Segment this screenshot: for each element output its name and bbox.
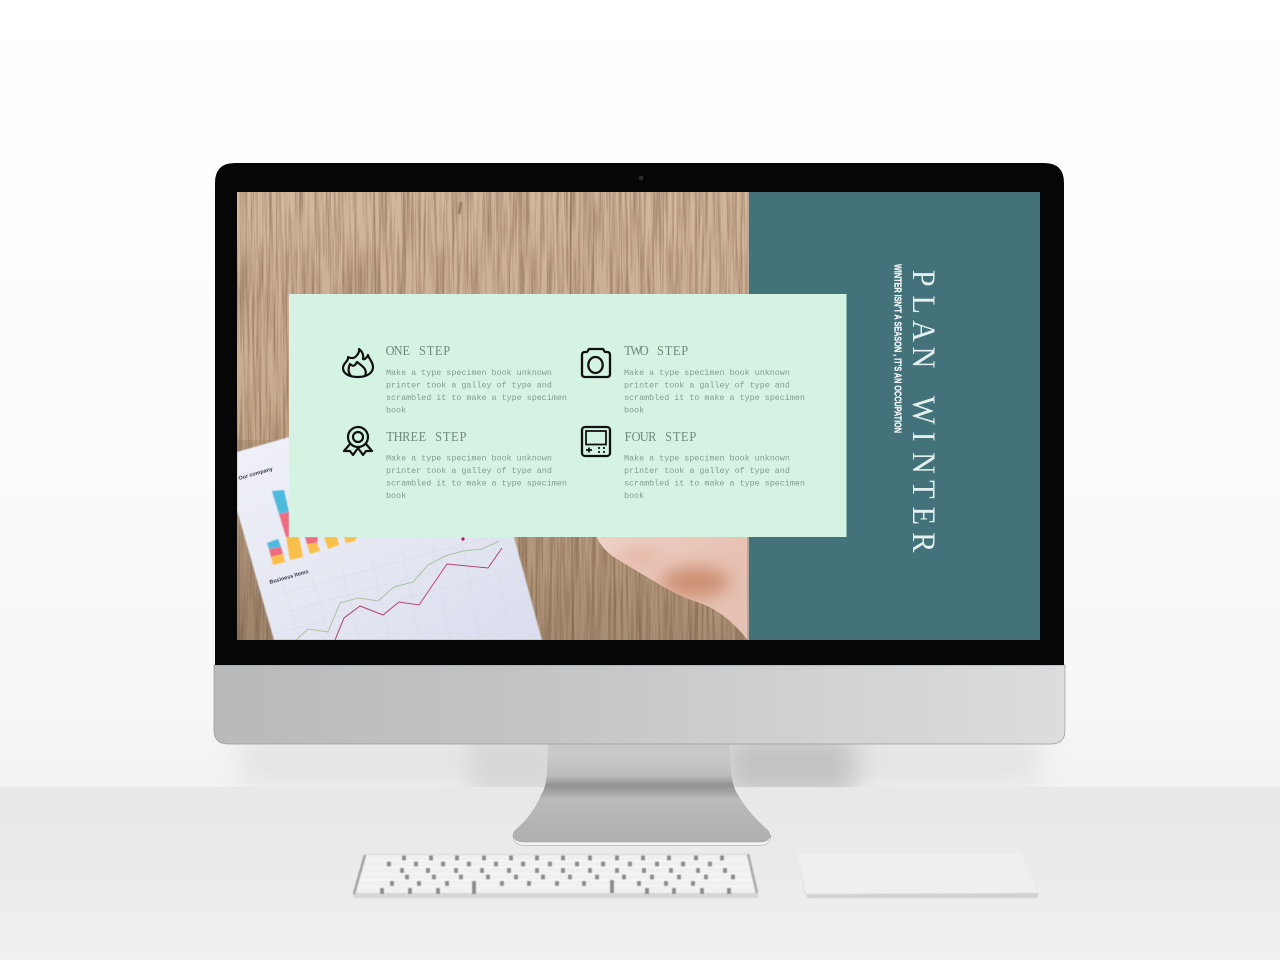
report paper bbox=[237, 437, 542, 640]
description bbox=[624, 368, 805, 416]
description bbox=[624, 454, 805, 501]
heading: THREE STEP bbox=[386, 429, 466, 444]
bar chart: our company bbox=[267, 490, 357, 565]
content card bbox=[289, 294, 846, 537]
step four bbox=[582, 427, 805, 501]
chart title: business items: Business Items bbox=[269, 569, 309, 586]
description: printer took a galley of type and bbox=[386, 466, 552, 476]
description bbox=[386, 368, 567, 416]
icon: camera bbox=[582, 349, 610, 377]
icon: handheld game console bbox=[582, 427, 610, 456]
hand bbox=[597, 537, 747, 640]
keyboard bbox=[353, 854, 758, 898]
monitor chin bbox=[214, 665, 1065, 744]
icon: flame bbox=[343, 349, 373, 377]
description bbox=[386, 454, 567, 501]
heading: FOUR STEP bbox=[625, 429, 696, 444]
chart title: our company: Our company bbox=[238, 466, 275, 482]
description: scrambled it to make a type specimen bbox=[624, 478, 805, 488]
title: plan winter: PLAN WINTER bbox=[906, 270, 942, 553]
description: book bbox=[624, 491, 644, 501]
teal side panel bbox=[747, 192, 1040, 640]
description: book bbox=[386, 491, 406, 501]
step two bbox=[582, 343, 805, 416]
description: printer took a galley of type and bbox=[386, 380, 552, 390]
trackpad bbox=[797, 853, 1038, 898]
line chart: pink series bbox=[335, 548, 502, 640]
description: book bbox=[624, 406, 644, 416]
icon: camera lens bbox=[639, 176, 643, 180]
description: Make a type specimen book unknown bbox=[624, 454, 790, 464]
heading: TWO STEP bbox=[624, 343, 688, 358]
description: printer took a galley of type and bbox=[624, 466, 790, 476]
subtitle: WINTER ISN'T A SEASON , IT'S AN OCCUPATION bbox=[892, 264, 904, 433]
monitor bezel bbox=[215, 163, 1064, 665]
step three bbox=[344, 427, 567, 501]
screen photo: wooden desk bbox=[237, 192, 750, 645]
icon: medal bbox=[344, 427, 372, 455]
description: scrambled it to make a type specimen bbox=[624, 393, 805, 403]
heading: ONE STEP bbox=[386, 343, 450, 358]
description: book bbox=[386, 406, 406, 416]
description: printer took a galley of type and bbox=[624, 380, 790, 390]
description: Make a type specimen book unknown bbox=[386, 368, 552, 378]
description: scrambled it to make a type specimen bbox=[386, 478, 567, 488]
description: Make a type specimen book unknown bbox=[386, 454, 552, 464]
monitor stand bbox=[513, 744, 771, 846]
background: wall and desk bbox=[0, 695, 1280, 960]
description: scrambled it to make a type specimen bbox=[386, 393, 567, 403]
description: Make a type specimen book unknown bbox=[624, 368, 790, 378]
step one bbox=[343, 343, 567, 416]
line chart: green series bbox=[296, 541, 499, 640]
legend dot bbox=[461, 537, 465, 541]
